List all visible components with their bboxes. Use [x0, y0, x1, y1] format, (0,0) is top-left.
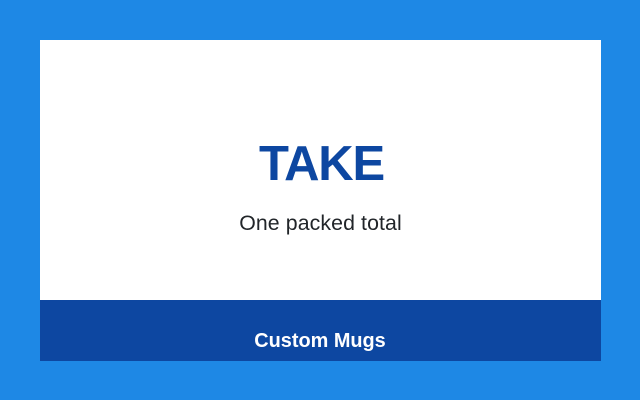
footer band [40, 300, 601, 361]
footer label: Custom Mugs [254, 330, 386, 352]
title: TAKE [259, 137, 384, 191]
subtitle text: One packed total [239, 211, 402, 235]
panel: white card [40, 40, 601, 361]
